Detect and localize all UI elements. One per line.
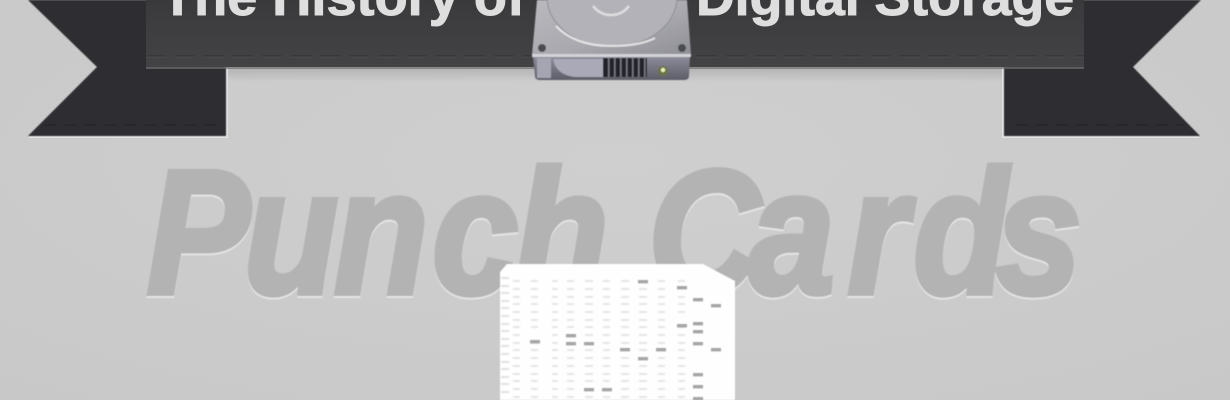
punch card bbox=[500, 264, 735, 400]
section heading: Punch Cards: Punch Cards bbox=[147, 136, 1081, 333]
icon: hard disk drive bbox=[532, 0, 691, 80]
ribbon tail: right bbox=[1002, 0, 1201, 138]
ribbon tail: left bbox=[28, 0, 228, 138]
card punched holes bbox=[530, 280, 721, 400]
card row labels and light data marks bbox=[501, 278, 685, 397]
section heading: Punch Cards: Punch Cards bbox=[147, 134, 1081, 331]
ribbon banner bbox=[146, 0, 1084, 69]
